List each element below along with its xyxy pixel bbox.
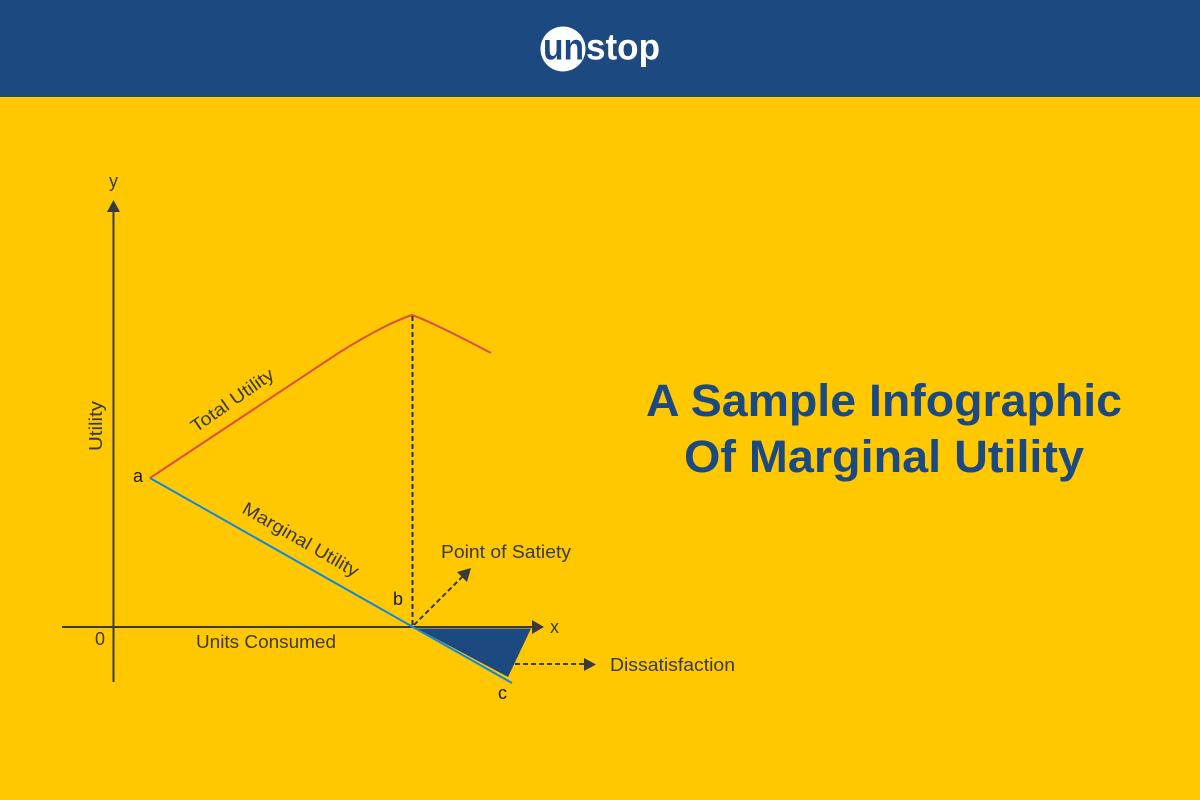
label: units consumed: Units Consumed xyxy=(196,632,336,652)
label: total utility: Total Utility xyxy=(187,364,278,436)
arrow: dissatisfaction xyxy=(515,658,596,671)
axis and point labels: x xyxy=(550,617,559,637)
satiety dashed vertical xyxy=(412,316,414,626)
axis and point labels: a xyxy=(133,466,144,486)
label: utility: Utility xyxy=(86,401,106,451)
x axis xyxy=(62,620,544,634)
label: dissatisfaction: Dissatisfaction xyxy=(610,655,735,675)
axis and point labels: c xyxy=(498,683,507,703)
axis and point labels xyxy=(95,171,559,703)
title: A Sample Infographic xyxy=(646,375,1122,426)
label: point of satiety: Point of Satiety xyxy=(441,542,571,562)
region: dissatisfaction triangle xyxy=(417,628,531,677)
label: marginal utility: Marginal Utility xyxy=(239,498,362,581)
logo: unstop: stop xyxy=(586,26,660,68)
axis and point labels: y xyxy=(109,171,118,191)
logo: unstop xyxy=(540,26,660,72)
marginal utility line xyxy=(150,478,512,683)
header bar xyxy=(0,0,1200,97)
total utility curve xyxy=(150,315,491,478)
axis and point labels: b xyxy=(393,589,403,609)
title xyxy=(646,375,1122,482)
logo: unstop: un xyxy=(543,26,584,68)
title: Of Marginal Utility xyxy=(684,431,1085,482)
arrow: point of satiety xyxy=(414,568,471,625)
y axis xyxy=(107,200,120,682)
axis and point labels: 0 xyxy=(95,629,105,649)
